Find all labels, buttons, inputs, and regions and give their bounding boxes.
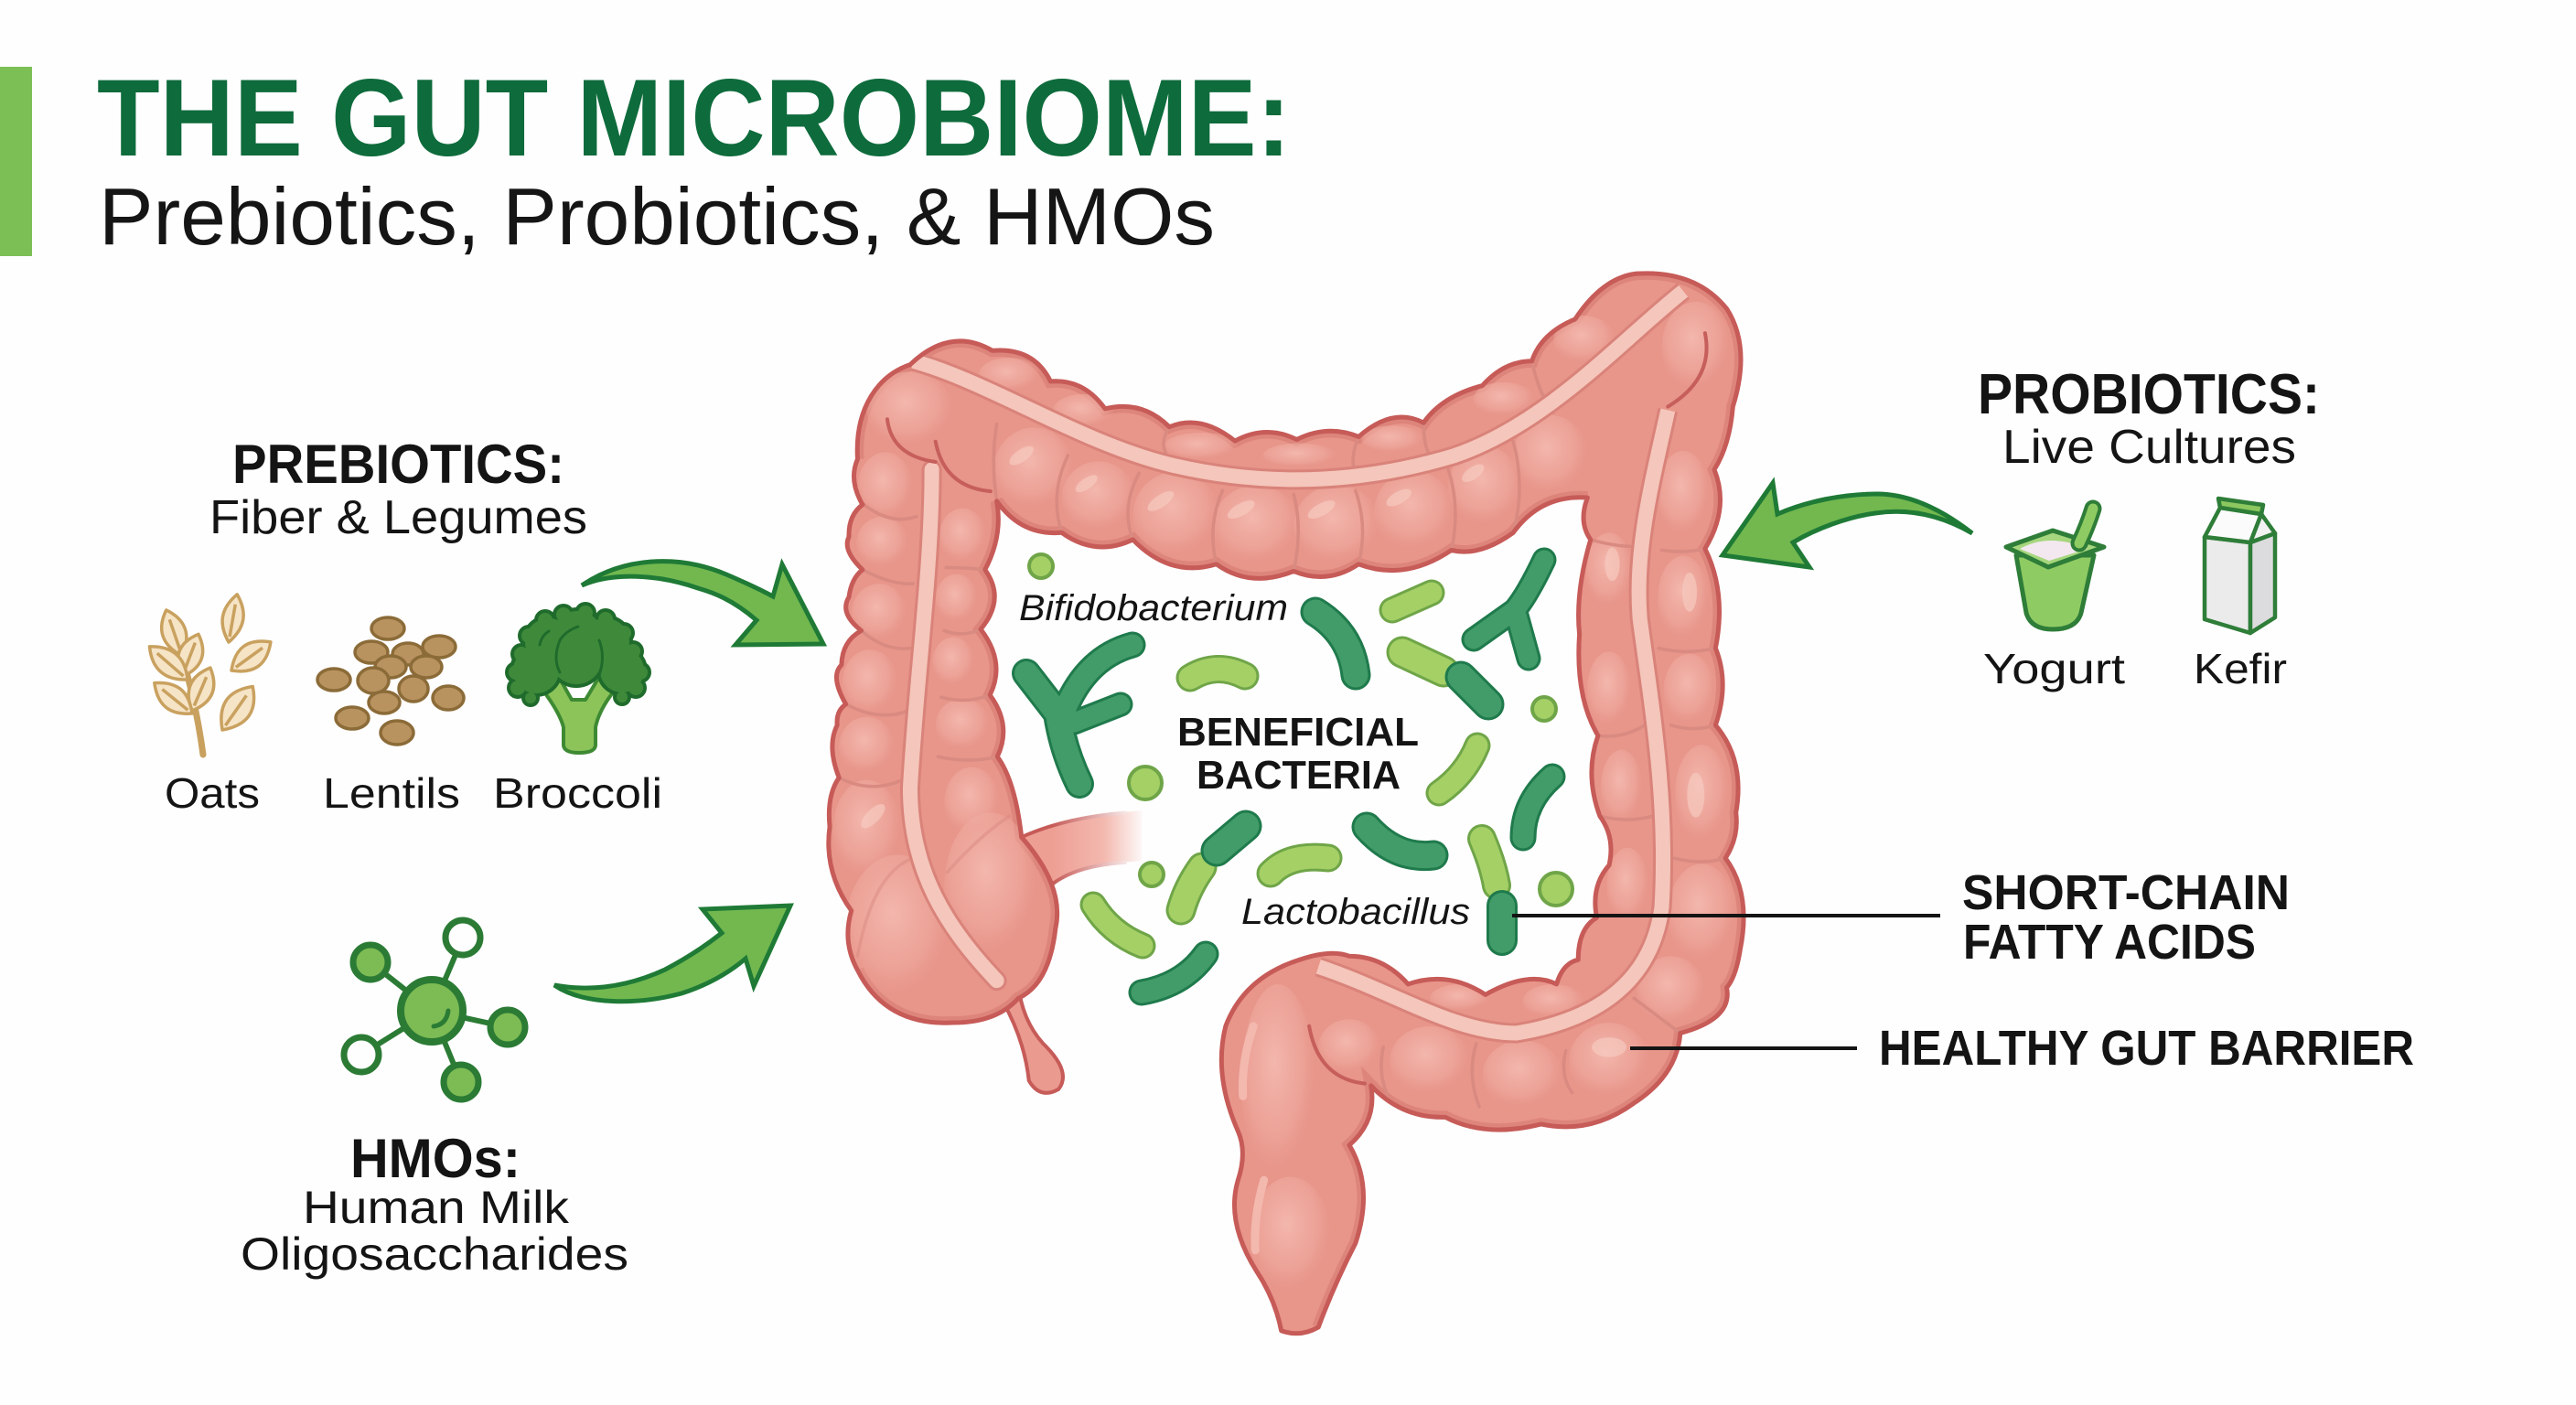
icon: yogurt bbox=[2006, 509, 2104, 629]
heading: probiotics: PROBIOTICS: bbox=[1978, 363, 2320, 426]
title bbox=[97, 57, 1291, 262]
icon: oats bbox=[142, 593, 278, 755]
heading: probiotics: Live Cultures bbox=[2002, 421, 2296, 474]
heading: probiotics bbox=[1978, 363, 2320, 474]
longitudinal bands bbox=[910, 291, 1683, 1033]
heading: prebiotics: PREBIOTICS: bbox=[232, 434, 564, 495]
colon body bbox=[829, 273, 1744, 1334]
label: Bifidobacterium: Bifidobacterium bbox=[1019, 588, 1288, 628]
heading: HMOs: Oligosaccharides bbox=[241, 1228, 628, 1280]
bacteria: cocci bbox=[1029, 554, 1572, 906]
group: beneficial bacteria bbox=[1019, 554, 1572, 992]
icon: broccoli bbox=[505, 602, 651, 753]
icon: kefir carton bbox=[2205, 499, 2275, 633]
label: broccoli: Broccoli bbox=[493, 769, 662, 817]
ileum bbox=[1018, 810, 1143, 886]
icon: lentils bbox=[317, 617, 464, 745]
heading: HMOs bbox=[241, 1128, 628, 1280]
callout: short-chain fatty acids: FATTY ACIDS bbox=[1963, 915, 2256, 970]
bacterium: branched left bbox=[1026, 645, 1132, 784]
label: beneficial bacteria bbox=[1177, 710, 1419, 798]
label: beneficial bacteria: BACTERIA bbox=[1197, 753, 1401, 798]
callout: healthy gut barrier: HEALTHY GUT BARRIER bbox=[1879, 1021, 2414, 1076]
title: Prebiotics, Probiotics, & HMOs bbox=[99, 171, 1215, 262]
bacteria: light rods bbox=[1093, 593, 1497, 946]
title accent bar bbox=[0, 67, 32, 256]
label: lentils: Lentils bbox=[323, 769, 460, 817]
label: yogurt: Yogurt bbox=[1983, 645, 2125, 692]
icon: HMO molecule bbox=[344, 920, 525, 1099]
panel: prebiotics bbox=[142, 434, 662, 817]
label: kefir: Kefir bbox=[2194, 645, 2287, 692]
haustra folds bbox=[839, 361, 1725, 1107]
label: Lactobacillus: Lactobacillus bbox=[1241, 892, 1470, 932]
bacteria: dark rods bbox=[1142, 612, 1552, 992]
haustra highlights bbox=[832, 302, 1736, 1295]
arrow: prebiotics to gut bbox=[582, 562, 823, 645]
appendix bbox=[1003, 984, 1063, 1093]
lobe glints bbox=[858, 443, 1704, 1057]
label: beneficial bacteria: BENEFICIAL bbox=[1177, 710, 1419, 755]
arrow: probiotics to gut bbox=[1723, 483, 1972, 567]
bacterium: branched right bbox=[1474, 560, 1544, 659]
heading: prebiotics: Fiber & Legumes bbox=[209, 491, 587, 544]
heading: HMOs: Human Milk bbox=[303, 1182, 570, 1233]
rectum highlights bbox=[1242, 1026, 1253, 1096]
title: THE GUT MICROBIOME: bbox=[97, 57, 1291, 179]
panel: HMOs bbox=[241, 920, 628, 1280]
illustration: large intestine bbox=[829, 273, 1744, 1334]
heading: prebiotics bbox=[209, 434, 587, 544]
callout: short-chain fatty acids bbox=[1512, 865, 2290, 970]
label: oats: Oats bbox=[165, 769, 260, 817]
panel: probiotics bbox=[1978, 363, 2320, 692]
arrow: HMOs to gut bbox=[554, 906, 790, 1002]
callout: short-chain fatty acids: SHORT-CHAIN bbox=[1962, 865, 2290, 920]
heading: HMOs: HMOs: bbox=[350, 1128, 521, 1189]
creases bbox=[887, 419, 936, 462]
